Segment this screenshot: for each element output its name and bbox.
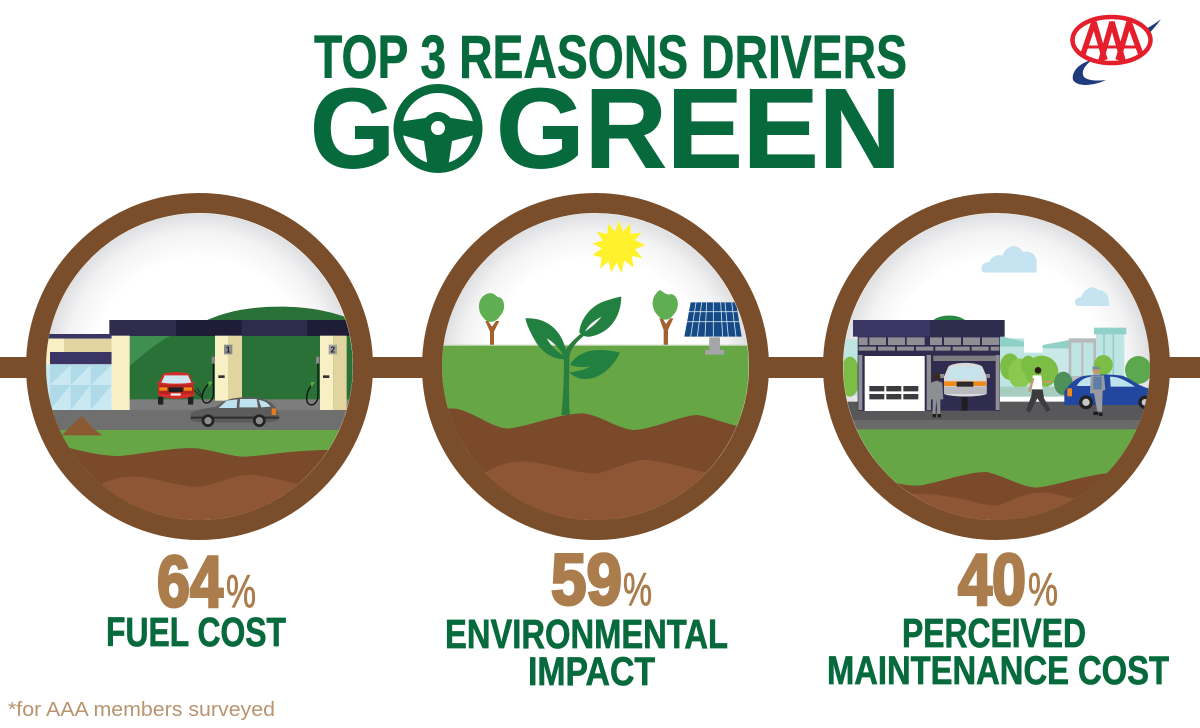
logo: AAA <box>1072 17 1161 85</box>
sky <box>846 214 1150 402</box>
title: go green: GREEN <box>496 66 901 192</box>
stat: 40%: 40 <box>958 540 1026 620</box>
city buildings <box>843 328 1126 397</box>
pump 1: 1 <box>226 345 231 355</box>
lower soil <box>910 493 1077 523</box>
dirt pile <box>62 416 103 435</box>
blue car <box>1064 374 1152 409</box>
grass <box>840 429 1153 503</box>
title: go green <box>310 66 901 192</box>
solar panel <box>684 302 742 344</box>
mechanic left <box>930 373 943 417</box>
title: go green: G <box>310 66 395 192</box>
circle ring: maintenance cost <box>833 203 1160 530</box>
label: environmental impact <box>445 611 728 694</box>
pump 2 <box>307 336 347 410</box>
clouds <box>981 246 1109 306</box>
horizon line <box>440 345 753 346</box>
grass <box>440 345 753 435</box>
connector bars <box>0 357 1200 378</box>
grass <box>60 430 339 464</box>
circle ring: environmental impact <box>432 203 759 530</box>
soil <box>70 448 328 520</box>
panel: fuel cost gas station <box>40 213 360 523</box>
soil <box>448 408 737 520</box>
label: environmental impact: ENVIRONMENTAL <box>445 611 728 657</box>
sky <box>50 214 344 334</box>
footnote: *for AAA members surveyed <box>8 698 275 721</box>
lower soil <box>485 460 707 523</box>
shop building <box>43 334 130 410</box>
pump 2: 2 <box>331 345 336 355</box>
stat: 64%: 64 <box>157 542 223 622</box>
stat: 59%: 59 <box>551 540 622 620</box>
garage <box>853 320 1005 411</box>
red car <box>156 372 203 405</box>
label: fuel cost: FUEL COST <box>106 609 286 655</box>
title: top 3 reasons drivers: TOP 3 REASONS DRIVERS <box>314 23 907 91</box>
sun <box>592 221 645 273</box>
lower soil <box>102 475 297 523</box>
station wall <box>129 336 356 401</box>
hill <box>933 315 965 320</box>
tree right <box>653 290 678 345</box>
stat: 40%: % <box>1028 563 1058 615</box>
mechanic right <box>1090 367 1105 416</box>
sky <box>444 214 747 345</box>
plant <box>525 297 621 415</box>
tree left <box>479 293 504 347</box>
circle ring: fuel cost <box>36 203 363 530</box>
trees <box>840 353 1152 397</box>
walking person <box>1026 367 1052 413</box>
pump 1 <box>202 336 242 403</box>
stat: 59%: % <box>623 563 652 615</box>
stat: 64%: % <box>226 565 256 617</box>
solar stand <box>705 338 724 355</box>
icon: steering wheel <box>398 88 478 168</box>
soil <box>880 472 1113 523</box>
hill <box>200 307 353 403</box>
label: perceived maintenance cost: PERCEIVED <box>902 610 1086 656</box>
road <box>840 402 1153 430</box>
road <box>43 399 357 430</box>
label: perceived maintenance cost <box>827 610 1169 693</box>
canopy <box>109 320 356 336</box>
lifted car <box>940 363 990 411</box>
panel: perceived maintenance cost <box>840 213 1153 523</box>
label: environmental impact: IMPACT <box>528 650 655 694</box>
grey car <box>191 397 279 427</box>
panel: environmental impact <box>440 213 753 523</box>
